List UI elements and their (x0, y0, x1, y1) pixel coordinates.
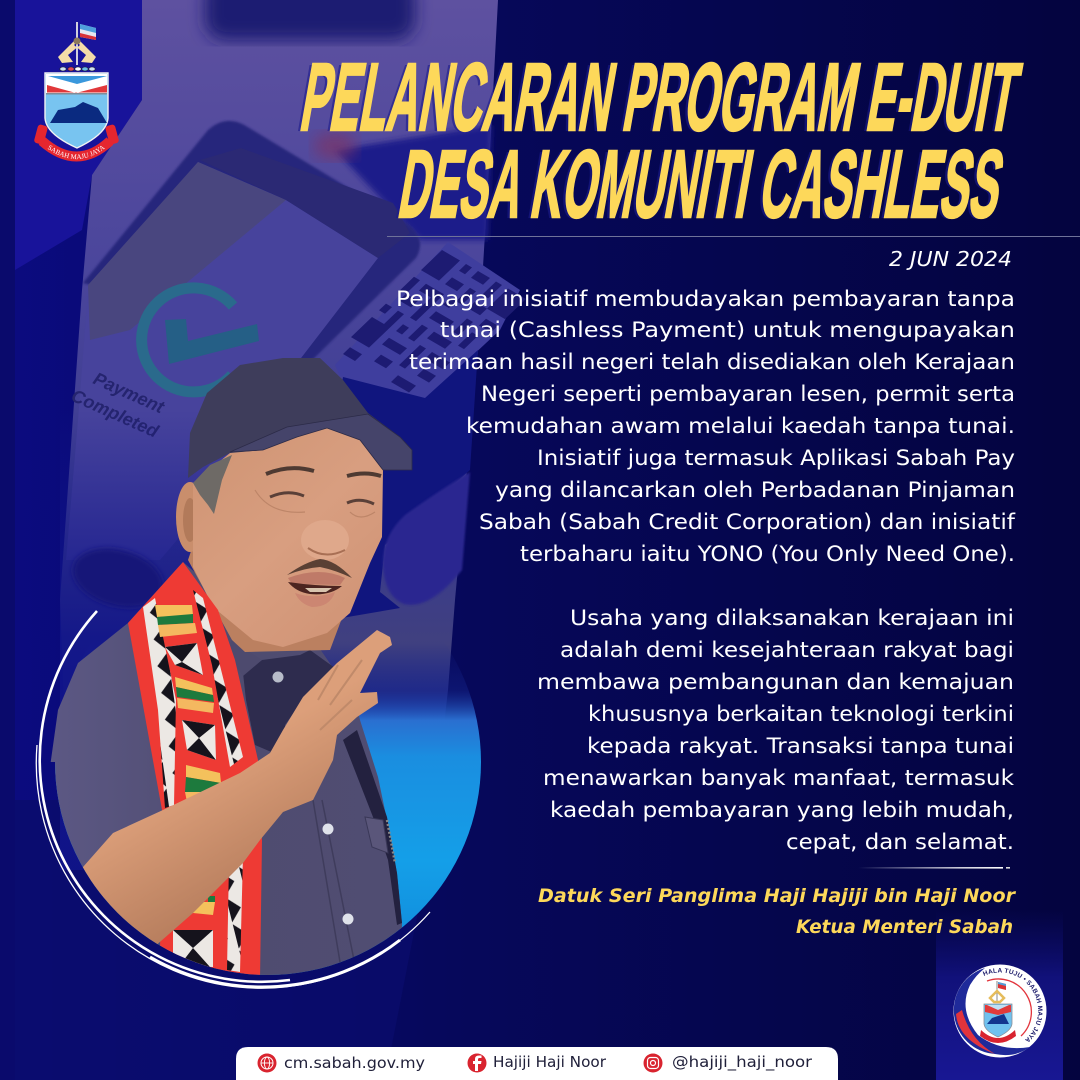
background photo: phone payment (60, 0, 526, 870)
sash lower zigzag (227, 855, 243, 972)
flag (77, 22, 96, 65)
signature rule (858, 867, 1010, 869)
badge crest (980, 981, 1016, 1043)
crest beads (60, 67, 95, 71)
ribbon scrolls (34, 124, 48, 145)
sash lower stripe (193, 902, 215, 915)
dark wedge below QR card (330, 350, 478, 620)
ribbon (42, 141, 110, 156)
moustache (287, 559, 352, 578)
instagram text: @hajiji_haji_noor (672, 1053, 813, 1072)
icon: facebook (468, 1054, 486, 1072)
upper lip (288, 572, 345, 585)
badge arc text (984, 972, 1038, 1049)
ribbon text (44, 146, 108, 159)
badge red arc (987, 979, 1031, 1036)
shirt (50, 562, 402, 1000)
signature: Datuk Seri Panglima Haji Hajiji bin Haji Noor (538, 885, 1017, 907)
eyes (270, 493, 304, 497)
portrait of Datuk Seri Panglima Haji Hajiji (50, 358, 412, 1000)
neck (188, 551, 341, 652)
QR code (337, 250, 526, 400)
QR card (335, 242, 520, 400)
lower fade over phone (60, 410, 300, 870)
sash coloured stripes (155, 605, 221, 802)
paragraph 2: khususnya berkaitan teknologi terkini (588, 702, 1014, 726)
phone outer frame (83, 121, 420, 385)
sash zigzag right (193, 590, 243, 767)
paragraph 1: Pelbagai inisiatif membudayakan pembayaran tanpa (396, 287, 1015, 311)
paragraph 1 (396, 287, 1016, 566)
panel: bottom right band (936, 910, 1063, 1080)
paragraph 1: Inisiatif juga termasuk Aplikasi Sabah Pay (537, 446, 1015, 470)
date: 2 JUN 2024 (889, 247, 1012, 271)
shield chevron (46, 74, 107, 94)
signature (538, 885, 1017, 938)
blue patch behind title (335, 125, 492, 240)
phone screen (66, 162, 378, 560)
crest arms (58, 40, 96, 63)
pocket (365, 817, 388, 853)
paragraph 2: kepada rakyat. Transaksi tanpa tunai (587, 734, 1014, 758)
title shadow (291, 44, 1024, 239)
blurred finger, left (66, 539, 170, 617)
title (291, 43, 1027, 239)
lower lip (295, 592, 335, 607)
ear (176, 482, 193, 552)
sash zigzag left (143, 598, 176, 808)
blurred shape at the top (205, 0, 415, 40)
paragraph 2: membawa pembangunan dan kemajuan (537, 670, 1014, 694)
raised arm and hand (60, 630, 392, 955)
logo: Sabah coat of arms: SABAH MAJU JAYA (48, 145, 105, 160)
text: Payment Completed: Completed (68, 385, 162, 442)
badge lanyard (387, 820, 395, 863)
paragraph 1: yang dilancarkan oleh Perbadanan Pinjaman (495, 478, 1015, 502)
badge: Hala Tuju Sabah Maju Jaya: HALA TUJU • SABAH MAJU JAYA (982, 968, 1043, 1042)
paragraph 1: Negeri seperti pembayaran lesen, permit serta (481, 382, 1015, 406)
blurred finger, right (383, 472, 470, 605)
cap visor (230, 414, 412, 470)
signature: Ketua Menteri Sabah (796, 916, 1013, 938)
phone grey wedge (88, 162, 286, 340)
phone notch band (200, 148, 410, 258)
icon: website (258, 1054, 276, 1072)
paragraph 2: cepat, dan selamat. (786, 830, 1014, 854)
title rule (387, 236, 1080, 237)
sash (128, 562, 262, 980)
shirt collar (243, 661, 260, 676)
footer contact bar (236, 1047, 838, 1080)
hair (193, 455, 232, 514)
shield (45, 73, 108, 148)
icon: instagram (644, 1054, 662, 1072)
nose (301, 520, 349, 560)
mouth (288, 582, 342, 594)
logo: Sabah coat of arms (34, 22, 119, 162)
paragraph 1: kemudahan awam melalui kaedah tanpa tunai. (466, 414, 1015, 438)
blurred red shape behind title (313, 132, 357, 160)
shirt placket (313, 800, 354, 962)
paragraph 1: tunai (Cashless Payment) untuk mengupayakan (440, 318, 1015, 342)
shirt buttons (272, 672, 354, 924)
text: Payment Completed: Payment (90, 368, 168, 418)
badge: Hala Tuju Sabah Maju Jaya (954, 964, 1046, 1058)
shield mountain (50, 102, 107, 123)
check-mark icon (142, 288, 259, 392)
paragraph 2: Usaha yang dilaksanakan kerajaan ini (570, 606, 1014, 630)
paragraph 1: terimaan hasil negeri telah disediakan oleh Kerajaan (409, 350, 1015, 374)
paragraph 1: Sabah (Sabah Credit Corporation) dan inisiatif (479, 510, 1016, 534)
white rings around portrait (36, 611, 430, 988)
face (193, 428, 383, 647)
paragraph 1: terbaharu iaitu YONO (You Only Need One). (520, 542, 1015, 566)
paragraph 2: adalah demi kesejahteraan rakyat bagi (560, 638, 1014, 662)
paragraph 2: menawarkan banyak manfaat, termasuk (543, 766, 1015, 790)
paragraph 2 (537, 606, 1015, 854)
sash hourglass patterns (165, 643, 216, 967)
shirt strap shading (343, 730, 402, 925)
cap (188, 358, 386, 478)
shirt dark front (243, 650, 335, 760)
eyebrows (266, 468, 314, 474)
website text: cm.sabah.gov.my (284, 1054, 425, 1072)
badge crescent (954, 968, 1030, 1055)
eye bags (255, 490, 375, 517)
blue circle behind portrait (55, 549, 481, 975)
paragraph 2: kaedah pembayaran yang lebih mudah, (550, 798, 1014, 822)
facebook text: Hajiji Haji Noor (493, 1053, 607, 1071)
